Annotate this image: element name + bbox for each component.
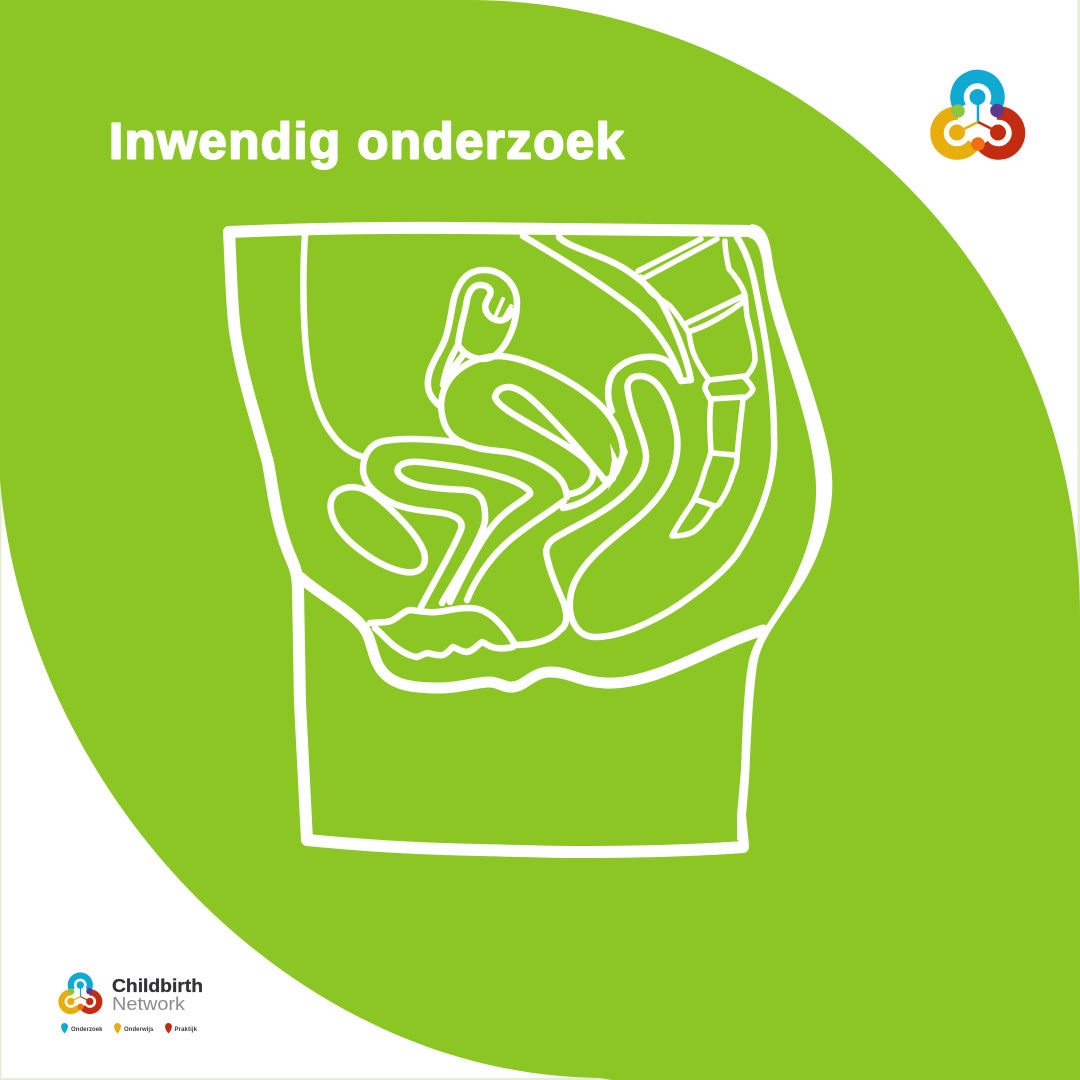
ovary and tube — [428, 270, 517, 407]
footer logo — [58, 972, 203, 1034]
uterus — [441, 356, 623, 508]
pubic bone — [331, 487, 425, 572]
legend: Onderwijs: Onderwijs — [124, 1027, 154, 1033]
wordmark: Childbirth — [112, 976, 203, 996]
logo: Childbirth Network mark — [929, 69, 1020, 161]
legend: Praktijk: Praktijk — [174, 1027, 198, 1033]
vagina and rectum — [608, 357, 691, 411]
body outline — [229, 224, 832, 852]
uterine cavity — [495, 387, 607, 483]
illustration: pelvis cross-section — [229, 224, 832, 852]
footer logo: Network — [112, 994, 186, 1014]
sacrum and coccyx — [638, 239, 701, 271]
legend: Onderzoek: Onderzoek — [71, 1027, 103, 1033]
title: Inwendig onderzoek — [109, 112, 625, 170]
peritoneum lines — [523, 236, 681, 381]
uterus rear wall thickening — [600, 436, 628, 490]
belly line — [303, 235, 365, 457]
small logo mark — [58, 972, 100, 1015]
vulva — [370, 608, 515, 645]
legend: Onderwijs — [114, 1023, 154, 1034]
legend: Praktijk — [165, 1023, 198, 1034]
bladder — [363, 439, 463, 607]
legend: Onderzoek — [61, 1023, 103, 1034]
inner organs — [303, 235, 774, 657]
